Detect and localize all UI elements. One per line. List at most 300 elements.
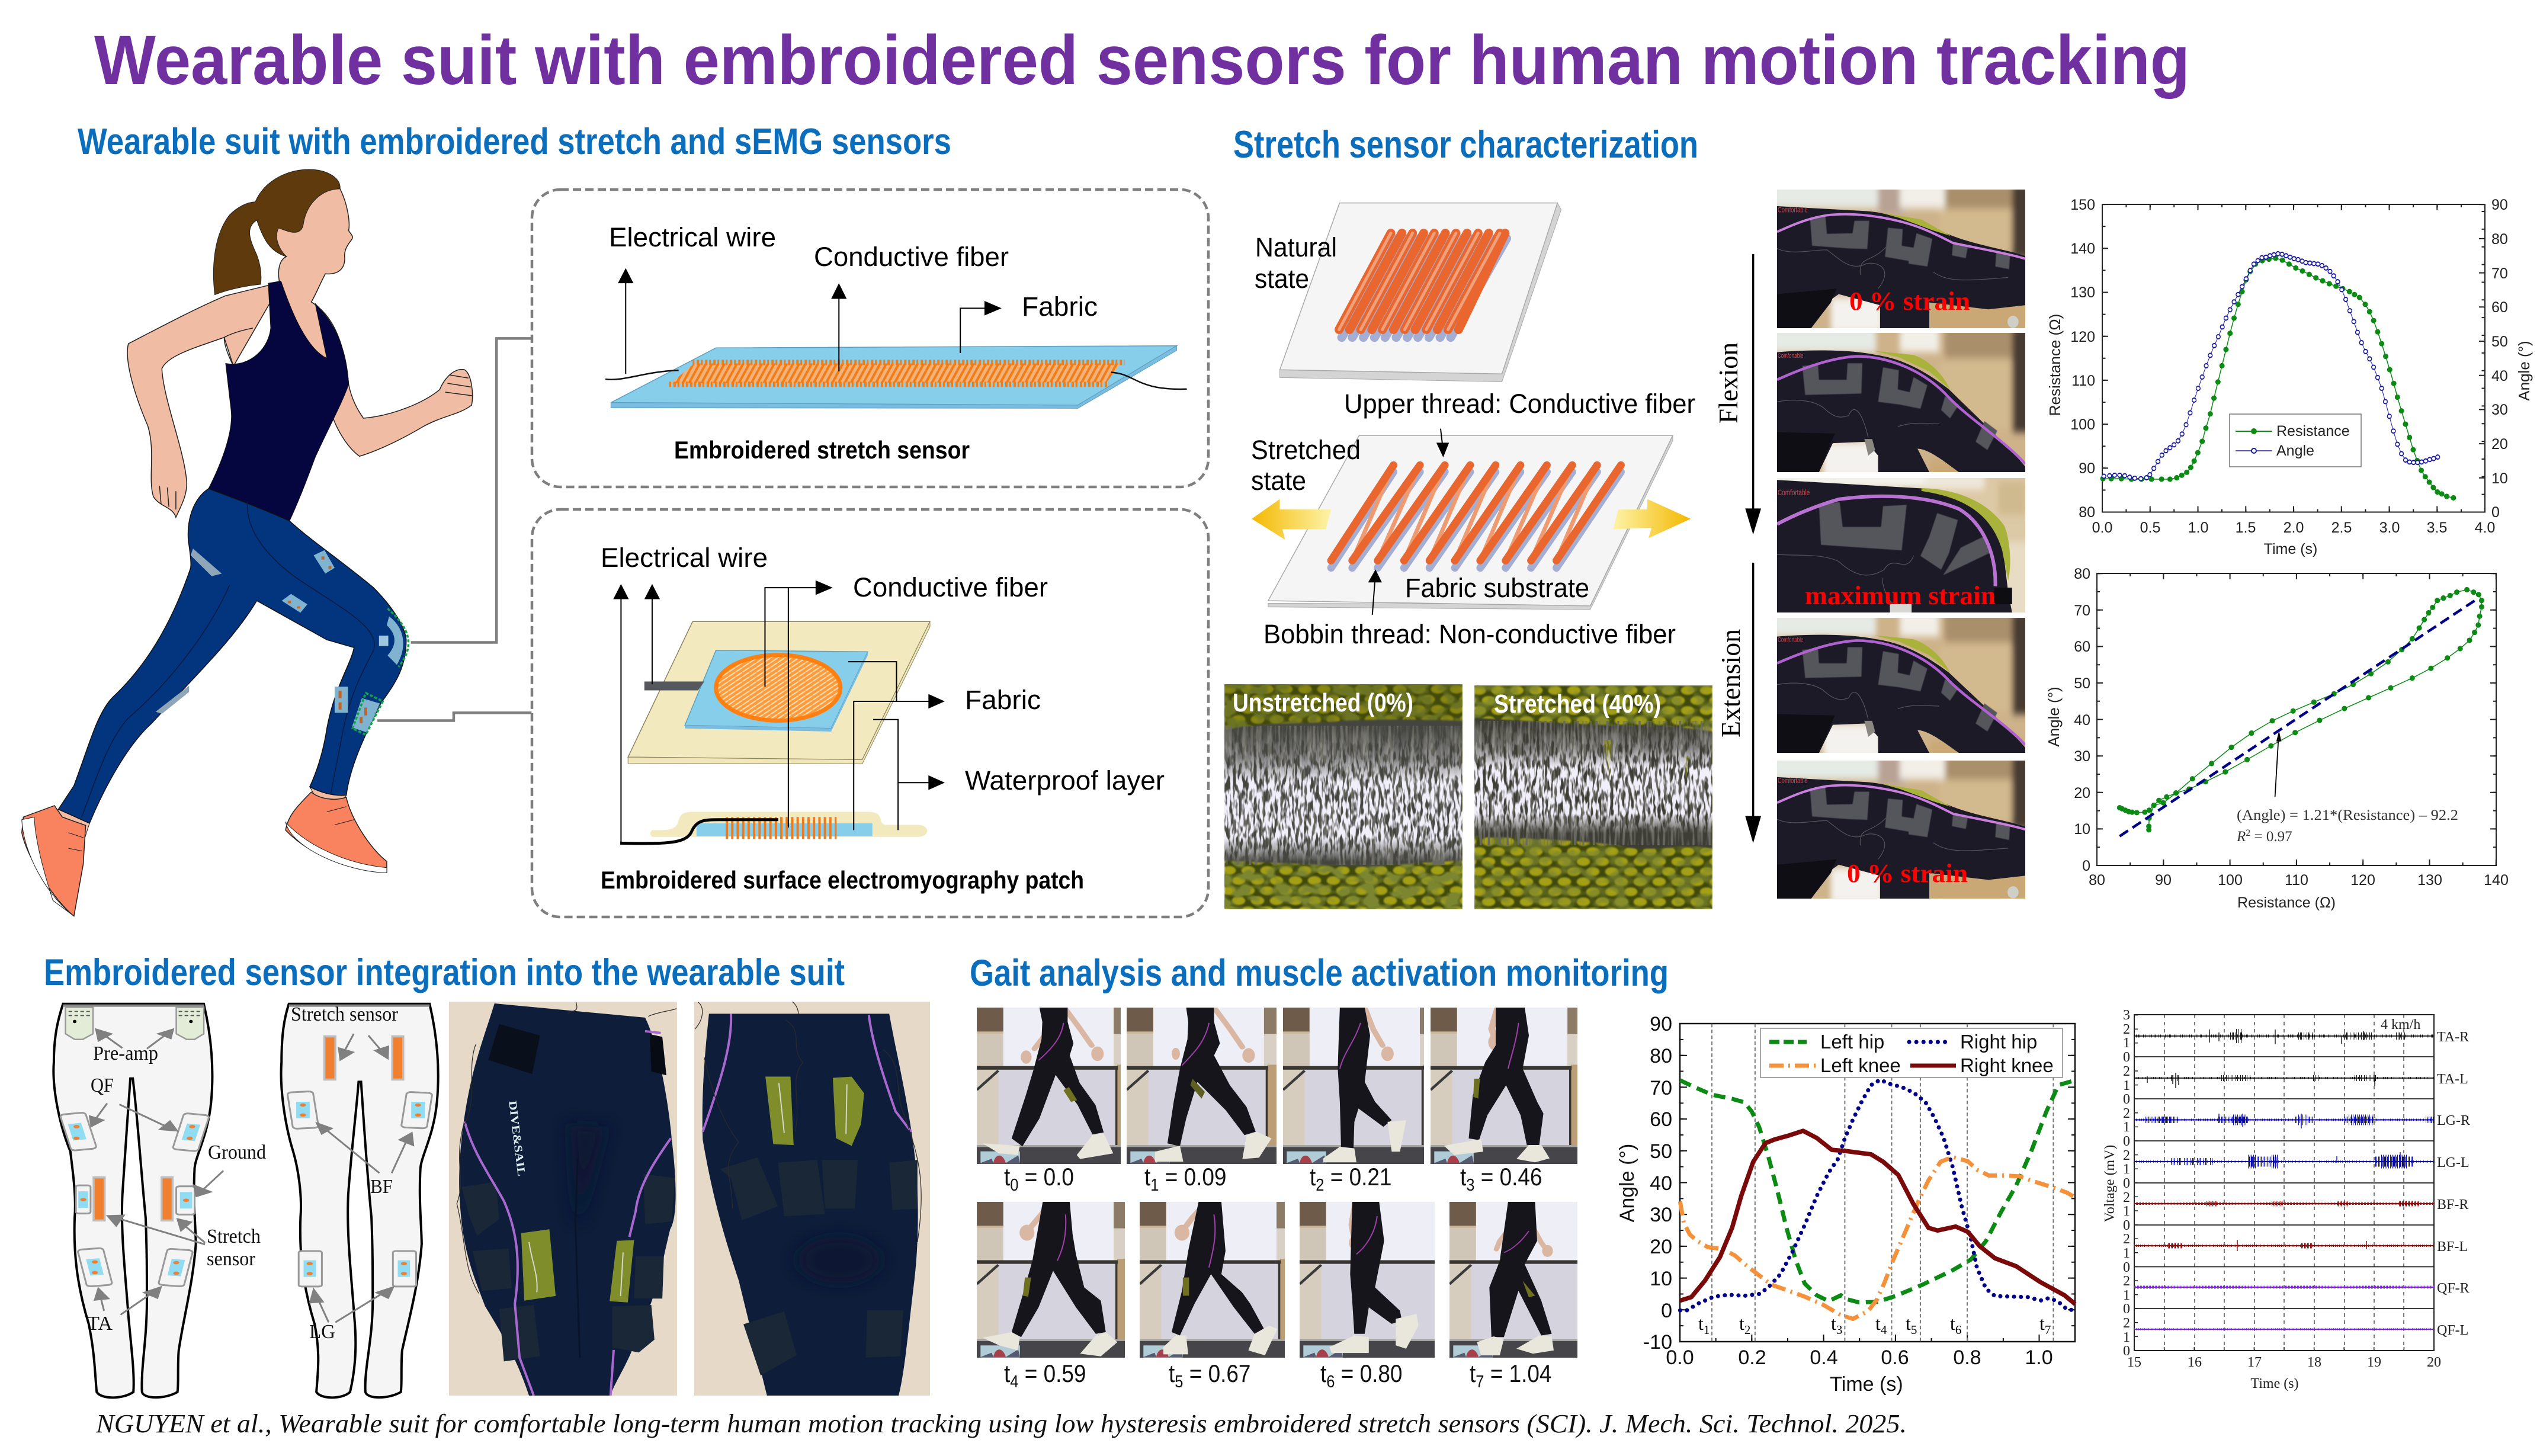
x axis labels: 0.0 xyxy=(2092,519,2112,536)
arrows: stretch sensor callouts xyxy=(618,268,1002,374)
y axis labels: 3 xyxy=(2123,1008,2130,1023)
label: fabric substrate: Fabric substrate xyxy=(1405,573,1589,603)
y axis labels: 1 xyxy=(2123,1078,2130,1093)
caption: embroidered stretch sensor: Embroidered stretch sensor xyxy=(674,436,970,464)
y axis labels: 90 xyxy=(1650,1013,1672,1035)
photo: flexion maximum strain: Comfortable xyxy=(1778,488,1810,497)
label: LG: LG xyxy=(309,1321,335,1343)
axis frame and dividers xyxy=(2134,1015,2434,1351)
y axis labels: 20 xyxy=(2074,785,2090,801)
x axis labels: 18 xyxy=(2307,1355,2321,1370)
patch electrodes xyxy=(68,1102,425,1277)
fit r squared: R xyxy=(2236,829,2246,845)
x axis labels: 2.5 xyxy=(2331,519,2352,536)
arrows: thread callouts xyxy=(1368,429,1449,615)
pants outline: front xyxy=(53,1004,212,1397)
gait frame t1 xyxy=(1127,1008,1277,1164)
time labels row 1: 3 xyxy=(1466,1175,1474,1194)
y axis labels xyxy=(2074,566,2090,874)
x axis labels: 2.0 xyxy=(2284,519,2304,536)
waistbands xyxy=(63,1005,429,1007)
diagram: pants with sensor placement xyxy=(52,1002,440,1399)
x axis labels: 3.5 xyxy=(2427,519,2447,536)
y axis labels: 2 xyxy=(2123,1106,2130,1121)
x axis labels: 1.0 xyxy=(2025,1346,2053,1369)
right axis labels: 60 xyxy=(2491,299,2508,316)
x axis labels: 20 xyxy=(2427,1355,2441,1370)
y axis title: Voltage (mV) xyxy=(2102,1145,2118,1222)
label: stretch sensor: Stretch sensor xyxy=(291,1003,399,1025)
leggings xyxy=(59,489,406,823)
y axis labels: 1 xyxy=(2123,1246,2130,1261)
x axis labels: 0.0 xyxy=(1666,1346,1694,1369)
x axis labels: 0.4 xyxy=(1810,1346,1838,1369)
arrow: stretch left xyxy=(1252,499,1331,540)
tank top xyxy=(209,281,349,521)
y axis title: Angle (°) xyxy=(2045,687,2063,747)
time labels row 2: = 0.67 xyxy=(1183,1360,1250,1388)
photo: flexion 0 % strain end xyxy=(1777,761,2025,899)
sensor patches on leggings xyxy=(156,549,408,735)
trace: BF-L xyxy=(2134,1240,2434,1251)
photo: extension intermediate xyxy=(1777,618,2025,753)
series: angle xyxy=(2104,254,2438,479)
y axis labels: 80 xyxy=(2074,566,2090,582)
y axis labels: 60 xyxy=(1650,1108,1672,1131)
right axis labels: 40 xyxy=(2491,368,2508,384)
shoe soles and laces xyxy=(22,807,387,916)
y axis title: angle: Angle (°) xyxy=(2515,341,2533,401)
left axis labels xyxy=(2070,197,2095,521)
garment print: brand name: DIVE&SAIL xyxy=(506,1100,527,1177)
y axis labels: 80 xyxy=(1650,1045,1672,1067)
time labels row 2: 7 xyxy=(1476,1371,1484,1391)
time labels row 1: 0 xyxy=(1010,1175,1018,1194)
x axis labels: 110 xyxy=(2285,872,2308,889)
gait frame t0 xyxy=(977,1008,1121,1164)
curve: left knee xyxy=(1680,1157,2075,1319)
time marker labels: t xyxy=(1831,1313,1836,1334)
label: fabric: Fabric xyxy=(1022,291,1098,322)
time marker labels: t xyxy=(1875,1313,1881,1334)
heading: gait analysis: Gait analysis and muscle activation monitoring xyxy=(970,953,1669,994)
stitches stretched xyxy=(1331,465,1621,568)
y axis labels xyxy=(2123,1008,2130,1359)
x axis labels: 90 xyxy=(2155,872,2172,889)
time marker labels: 4 xyxy=(1881,1323,1887,1337)
arrow: fit annotation xyxy=(2275,730,2281,797)
diagram: sEMG patch layers xyxy=(620,621,930,844)
panel: stretch sensor characterization xyxy=(1224,123,2533,911)
time labels row 1: 1 xyxy=(1150,1175,1159,1194)
channel labels: TA-R xyxy=(2437,1030,2469,1045)
panel: gait analysis and muscle activation monitoring xyxy=(970,953,2470,1396)
label: upper thread: Upper thread: Conductive fiber xyxy=(1344,389,1695,419)
legend: Left knee xyxy=(1820,1054,1901,1076)
ankle skin xyxy=(54,787,347,841)
gait frame t6 xyxy=(1300,1202,1435,1358)
label: stretch: Stretch xyxy=(207,1226,261,1247)
illustration: running woman xyxy=(21,169,1187,917)
x axis labels: 130 xyxy=(2417,872,2442,889)
channel labels: QF-L xyxy=(2437,1323,2468,1338)
gait frame t5 xyxy=(1140,1202,1285,1358)
arrows: callouts xyxy=(89,1028,414,1322)
y axis labels: 0 xyxy=(2123,1343,2130,1359)
strain label 0 % bottom: 0 % strain xyxy=(1847,859,1968,888)
arrows: sEMG patch callouts xyxy=(613,581,945,843)
time labels row 2: t xyxy=(1470,1360,1476,1388)
axis frame and ticks xyxy=(2102,204,2485,512)
y axis labels: 1 xyxy=(2123,1120,2130,1135)
axis frame and ticks xyxy=(1680,1024,2075,1342)
channel labels xyxy=(2437,1030,2470,1338)
channel labels: BF-L xyxy=(2437,1239,2468,1255)
panel: embroidered sensor integration xyxy=(44,952,930,1397)
time marker labels: t xyxy=(1698,1313,1704,1334)
x axis labels: 80 xyxy=(2089,872,2105,889)
hair and ponytail xyxy=(213,169,340,294)
title: Wearable suit with embroidered sensors for human motion tracking xyxy=(94,21,2190,100)
time labels row 2: t xyxy=(1320,1360,1326,1388)
x axis labels xyxy=(1666,1346,2053,1396)
citation: NGUYEN et al., Wearable suit for comfortable long-term human motion tracking using low hysteresis embroidered stretch sensors (SCI). J. Mech. Sci. Technol. 2025. xyxy=(95,1409,1907,1438)
arrow: stretch right xyxy=(1613,499,1691,538)
left axis labels: 140 xyxy=(2070,240,2095,257)
y axis labels: 10 xyxy=(1650,1268,1672,1290)
gait frame t3 xyxy=(1431,1008,1577,1164)
axis frame and ticks xyxy=(2097,573,2496,865)
label: ground: Ground xyxy=(208,1141,266,1163)
trace: BF-R xyxy=(2134,1203,2434,1204)
time marker labels xyxy=(1698,1313,2051,1337)
label: fabric patch: Fabric xyxy=(965,685,1041,715)
linear fit xyxy=(2119,598,2478,836)
x axis labels xyxy=(2092,519,2495,557)
trace: TA-R xyxy=(2134,1030,2434,1044)
box: surface electromyography patch xyxy=(532,509,1208,917)
fit r squared: = 0.97 xyxy=(2250,829,2292,845)
x axis labels xyxy=(2127,1355,2441,1391)
chart: sEMG voltage traces xyxy=(2102,1008,2470,1391)
heading: stretch sensor characterization: Stretch sensor characterization xyxy=(1233,123,1698,166)
y axis labels: 1 xyxy=(2123,1204,2130,1219)
time marker labels: 6 xyxy=(1955,1323,1961,1337)
speed note: 4 km/h xyxy=(2381,1017,2420,1032)
right axis labels xyxy=(2491,197,2508,521)
data series and fit xyxy=(2117,586,2484,838)
y axis labels: 2 xyxy=(2123,1064,2130,1079)
panel: wearable suit with embroidered stretch and sEMG sensors xyxy=(22,121,1208,917)
time labels row 2: t xyxy=(1004,1360,1010,1388)
x axis labels: 19 xyxy=(2367,1355,2381,1370)
channel labels: TA-L xyxy=(2437,1072,2468,1087)
sEMG patches xyxy=(60,1091,432,1287)
photo label: unstretched: Unstretched (0%) xyxy=(1233,688,1413,717)
left axis labels: 150 xyxy=(2070,197,2095,213)
time marker labels: 3 xyxy=(1836,1323,1842,1337)
right axis labels: 90 xyxy=(2491,197,2508,213)
photo: unstretched embroidery xyxy=(1224,684,1463,909)
chart: resistance and angle vs time xyxy=(2046,197,2533,557)
y axis labels: 2 xyxy=(2123,1231,2130,1247)
time labels row 1: = 0.0 xyxy=(1018,1163,1074,1191)
time labels row 1: = 0.21 xyxy=(1324,1163,1391,1191)
fabric plate stretched xyxy=(1268,435,1673,610)
label: bobbin thread: Bobbin thread: Non-conductive fiber xyxy=(1263,619,1676,649)
curve: left hip xyxy=(1680,1080,2075,1303)
x axis labels: 1.0 xyxy=(2188,519,2208,536)
y axis labels: 40 xyxy=(2074,712,2090,729)
y axis labels: 10 xyxy=(2074,821,2090,838)
time labels row 2: 5 xyxy=(1175,1371,1183,1391)
label: stretched state: Stretched xyxy=(1251,435,1361,465)
connector lines from knee to detail boxes xyxy=(377,338,531,721)
time labels row 2: = 0.59 xyxy=(1018,1360,1086,1388)
photo: flexion intermediate xyxy=(1777,333,2025,472)
y axis labels: 1 xyxy=(2123,1330,2130,1345)
trace: QF-R xyxy=(2134,1287,2434,1288)
skin: arms, neck and face xyxy=(127,188,473,517)
x axis labels: 100 xyxy=(2218,872,2243,889)
left axis labels: 90 xyxy=(2079,460,2095,477)
time labels row 1: t xyxy=(1004,1163,1010,1191)
curve: right knee xyxy=(1680,1131,2075,1304)
right axis labels: 20 xyxy=(2491,436,2508,453)
x axis labels: 0.5 xyxy=(2140,519,2160,536)
y axis title: resistance: Resistance (Ω) xyxy=(2046,314,2064,416)
y axis labels: 60 xyxy=(2074,639,2090,655)
left axis labels: 80 xyxy=(2079,504,2095,521)
right axis labels: 80 xyxy=(2491,231,2508,248)
chart: angle vs resistance xyxy=(2045,566,2509,911)
y axis labels: 0 xyxy=(2123,1092,2130,1107)
heading: sensor integration: Embroidered sensor integration into the wearable suit xyxy=(44,952,845,993)
vertical guide lines xyxy=(2164,1015,2404,1351)
x axis labels: Resistance (Ω) xyxy=(2237,894,2336,911)
leggings seams xyxy=(82,502,374,817)
right axis labels: 0 xyxy=(2491,504,2500,521)
pre-amp pockets xyxy=(66,1007,204,1040)
hand and arm detail lines xyxy=(159,328,473,509)
fit r squared: 2 xyxy=(2246,828,2250,838)
gait frame t2 xyxy=(1283,1008,1424,1164)
legend: Right knee xyxy=(1960,1054,2054,1076)
legend: Right hip xyxy=(1960,1031,2037,1053)
x axis labels: 0.6 xyxy=(1881,1346,1909,1369)
photo label: stretched: Stretched (40%) xyxy=(1494,689,1661,719)
series: resistance xyxy=(2103,258,2454,498)
legend xyxy=(2230,414,2361,467)
curve: right hip xyxy=(1680,1080,2075,1310)
x axis labels: 16 xyxy=(2188,1355,2202,1370)
label: conductive fiber patch: Conductive fiber xyxy=(853,572,1048,602)
y axis labels: 2 xyxy=(2123,1316,2130,1331)
y axis labels: 0 xyxy=(2123,1260,2130,1275)
channel labels: QF-R xyxy=(2437,1281,2470,1296)
label: electrical wire: Electrical wire xyxy=(609,222,776,252)
y axis title: Angle (°) xyxy=(1616,1144,1638,1222)
left axis labels: 130 xyxy=(2070,284,2095,301)
label: TA: TA xyxy=(87,1313,113,1335)
trace: TA-L xyxy=(2134,1073,2434,1088)
rear shoe xyxy=(22,806,86,916)
time marker labels: 7 xyxy=(2045,1323,2051,1337)
photo: flexion maximum strain xyxy=(1777,478,2025,612)
y axis labels: -10 xyxy=(1643,1331,1672,1354)
time marker labels: t xyxy=(1906,1313,1911,1334)
channel labels: BF-R xyxy=(2437,1197,2468,1213)
y axis labels: 30 xyxy=(1650,1204,1672,1226)
y axis labels: 2 xyxy=(2123,1148,2130,1163)
y axis labels: 50 xyxy=(2074,675,2090,692)
front shoe xyxy=(286,792,387,873)
time labels row 2: 4 xyxy=(1010,1371,1018,1391)
time labels row 2: 6 xyxy=(1326,1371,1335,1391)
x axis labels: Time (s) xyxy=(2250,1376,2299,1391)
x axis labels: 1.5 xyxy=(2236,519,2256,536)
time marker labels: t xyxy=(1950,1313,1955,1334)
left axis labels: 120 xyxy=(2070,329,2095,345)
y axis labels: 20 xyxy=(1650,1236,1672,1258)
time labels row 2: = 1.04 xyxy=(1484,1360,1551,1388)
y axis labels: 0 xyxy=(2082,858,2090,874)
legend: Left hip xyxy=(1820,1031,1884,1053)
y axis labels: 30 xyxy=(2074,748,2090,765)
legend xyxy=(1760,1028,2063,1077)
x axis labels xyxy=(2089,872,2509,911)
y axis labels: 0 xyxy=(2123,1050,2130,1065)
time labels row 1: t xyxy=(1310,1163,1316,1191)
channel labels: LG-R xyxy=(2437,1113,2470,1128)
y axis labels: 1 xyxy=(2123,1288,2130,1303)
time marker labels: 1 xyxy=(1704,1323,1710,1337)
time labels row 1 xyxy=(1004,1163,1542,1194)
stretch sensor strips xyxy=(94,1037,403,1220)
time labels row 1: = 0.46 xyxy=(1474,1163,1542,1191)
channel labels: LG-L xyxy=(2437,1155,2470,1170)
caption: embroidered surface electromyography patch: Embroidered surface electromyography patch xyxy=(601,866,1084,894)
label: natural state: Natural xyxy=(1255,232,1337,262)
time marker labels: 2 xyxy=(1744,1323,1750,1337)
time labels row 2: = 0.80 xyxy=(1335,1360,1402,1388)
series: hysteresis loop xyxy=(2119,589,2481,830)
arrow: flexion xyxy=(1745,254,1761,534)
label: extension: Extension xyxy=(1715,629,1746,737)
trace: LG-R xyxy=(2134,1114,2434,1128)
y axis labels: 2 xyxy=(2123,1190,2130,1205)
label: pre-amp: Pre-amp xyxy=(93,1043,158,1064)
x axis labels: 4.0 xyxy=(2475,519,2495,536)
y axis labels: 70 xyxy=(2074,602,2090,619)
y axis labels xyxy=(1643,1013,1672,1354)
x axis labels: 0.2 xyxy=(1738,1346,1766,1369)
arrow: extension xyxy=(1745,563,1761,843)
y axis labels: 70 xyxy=(1650,1077,1672,1099)
label: stretched state second line: state xyxy=(1251,466,1306,496)
time labels row 2: t xyxy=(1169,1360,1175,1388)
trace: QF-L xyxy=(2134,1329,2434,1330)
y axis labels: 2 xyxy=(2123,1274,2130,1289)
chart: joint angle vs time xyxy=(1616,1013,2075,1396)
label: QF: QF xyxy=(91,1075,114,1096)
right axis labels: 10 xyxy=(2491,470,2508,487)
fit equation: (Angle) = 1.21*(Resistance) – 92.2 xyxy=(2237,807,2458,823)
label: sensor: sensor xyxy=(207,1248,256,1270)
y axis labels: 50 xyxy=(1650,1140,1672,1163)
x axis labels: 120 xyxy=(2350,872,2375,889)
gait frame t7 xyxy=(1449,1202,1577,1358)
time labels row 1: t xyxy=(1460,1163,1466,1191)
right axis labels: 30 xyxy=(2491,402,2508,418)
x axis labels: 0.8 xyxy=(1953,1346,1981,1369)
y axis labels: 0 xyxy=(2123,1134,2130,1149)
y axis labels: 40 xyxy=(1650,1172,1672,1195)
x axis labels: 3.0 xyxy=(2379,519,2400,536)
diagram: natural and stretched stitch states xyxy=(1252,203,1761,844)
photo: flexion 0 % strain start xyxy=(1777,190,2025,328)
y axis labels: 2 xyxy=(2123,1022,2130,1037)
time labels row 1: t xyxy=(1144,1163,1150,1191)
time labels row 2 xyxy=(1004,1360,1551,1391)
y axis labels: 1 xyxy=(2123,1035,2130,1051)
x axis labels: 15 xyxy=(2127,1355,2141,1370)
gait frame t4 xyxy=(977,1202,1125,1358)
x axis labels: Time (s) xyxy=(2264,541,2317,557)
time labels row 1: 2 xyxy=(1316,1175,1324,1194)
strain label maximum: maximum strain xyxy=(1805,581,1996,610)
photo: suit back xyxy=(694,1002,930,1396)
left axis labels: 110 xyxy=(2071,373,2095,389)
label: waterproof layer: Waterproof layer xyxy=(965,765,1165,796)
data series xyxy=(2100,251,2456,501)
label: electrical wire patch: Electrical wire xyxy=(601,543,768,573)
x axis labels: 17 xyxy=(2247,1355,2262,1370)
pants outline: back xyxy=(281,1004,438,1397)
left axis labels: 100 xyxy=(2070,416,2095,433)
trace: LG-L xyxy=(2134,1152,2434,1167)
y axis labels: 1 xyxy=(2123,1162,2130,1177)
heading: wearable suit: Wearable suit with embroidered stretch and sEMG sensors xyxy=(78,121,951,162)
y axis labels: 0 xyxy=(2123,1301,2130,1317)
time marker labels: 5 xyxy=(1911,1323,1917,1337)
right axis labels: 50 xyxy=(2491,333,2508,350)
label: conductive fiber: Conductive fiber xyxy=(814,242,1009,272)
strain label 0 % top: 0 % strain xyxy=(1849,287,1970,316)
curves xyxy=(1678,1024,2077,1341)
time marker labels: t xyxy=(2039,1313,2045,1334)
photo: suit front xyxy=(449,1002,677,1396)
label: BF: BF xyxy=(370,1176,393,1198)
fabric plate natural xyxy=(1280,203,1561,381)
x axis labels: Time (s) xyxy=(1830,1373,1903,1396)
photo: stretched embroidery xyxy=(1474,685,1712,909)
box: embroidered stretch sensor xyxy=(532,190,1208,487)
time marker labels: t xyxy=(1739,1313,1744,1334)
time markers xyxy=(1712,1024,2053,1342)
x axis labels: 140 xyxy=(2484,872,2509,889)
right axis labels: 70 xyxy=(2491,265,2508,282)
y axis labels: 0 xyxy=(2123,1176,2130,1191)
y axis labels: 0 xyxy=(2123,1218,2130,1233)
stitches natural xyxy=(1339,233,1507,338)
legend: Resistance xyxy=(2276,423,2350,440)
diagram: embroidered stretch sensor sheet xyxy=(605,346,1187,408)
label: natural state second line: state xyxy=(1255,264,1309,294)
legend: Angle xyxy=(2276,442,2314,459)
time labels row 1: = 0.09 xyxy=(1159,1163,1226,1191)
y axis labels: 0 xyxy=(1661,1300,1672,1322)
